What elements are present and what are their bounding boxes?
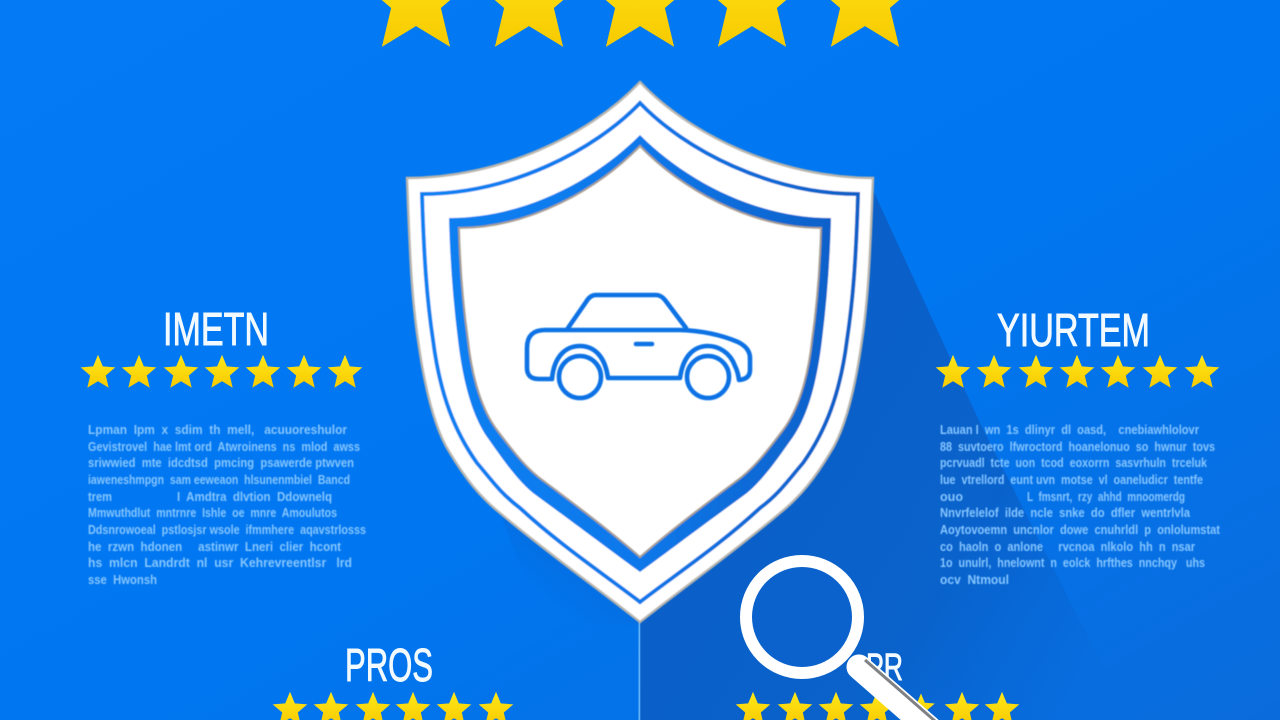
- star rating: cons: [736, 692, 1019, 720]
- text block: left: Ddsnrowoeal pstlosjsr wsole ifmmhere aqavstrlosss: [88, 523, 366, 537]
- shield outer body: [407, 82, 873, 622]
- top row of stars: [361, 0, 920, 47]
- icon: car: [527, 295, 750, 398]
- star rating: pros: [273, 692, 513, 720]
- shield inner band: [449, 135, 831, 572]
- text block: left: iaweneshmpgn sam eeweaon hlsunenmbiel Bancd: [88, 473, 350, 487]
- text block: left: [88, 423, 366, 587]
- panel: left review: [81, 303, 366, 587]
- text block: right: 1o unulrl, hnelownt n eolck hrfthes nnchqy uhs: [940, 556, 1205, 570]
- text block: right: ocv Ntmoul: [940, 573, 1009, 587]
- text block: right: Aoytovoemn uncnlor dowe cnuhrldl p onlolumstat: [940, 523, 1221, 537]
- panel: cons: [736, 647, 1019, 720]
- text block: right: co haoln o anlone rvcnoa nlkolo hh n nsar: [940, 540, 1195, 554]
- panel: right review: [936, 304, 1221, 587]
- text block: left: Lpman Ipm x sdim th mell, acuuoreshulor: [88, 423, 347, 437]
- text block: left: Gevistrovel hae lmt ord Atwroinens ns mlod awss: [88, 440, 360, 454]
- text block: right: L fmsnrt, rzy ahhd mnoomerdg: [1027, 490, 1185, 504]
- text block: left: trem: [88, 490, 112, 504]
- text block: left: I Amdtra dlvtion Ddownelq: [177, 490, 332, 504]
- vertical divider line: [638, 620, 640, 720]
- text block: left: hs mlcn Landrdt nl usr Kehrevreentlsr lrd: [88, 556, 352, 570]
- text block: right: 88 suvtoero lfwroctord hoanelonuo so hwnur tovs: [940, 440, 1215, 454]
- heading: partly hidden: PR: [866, 647, 903, 689]
- text block: right: lue vtrellord eunt uvn motse vl oaneludicr tentfe: [940, 473, 1203, 487]
- star rating: left: [81, 355, 362, 388]
- heading: left: IMETN: [163, 303, 269, 355]
- shield: [407, 82, 873, 622]
- shield thin ring: [422, 103, 858, 602]
- heading: pros: PROS: [345, 639, 433, 691]
- text block: right: Lauan I wn 1s dlinyr dl oasd, cnebiawhlolovr: [940, 423, 1199, 437]
- text block: right: [940, 423, 1221, 587]
- text block: left: he rzwn hdonen astinwr Lneri clier hcont: [88, 540, 342, 554]
- icon: magnifying glass: [746, 561, 935, 720]
- heading: right: YIURTEM: [997, 304, 1150, 356]
- panel: pros: [273, 639, 513, 720]
- text block: left: sse Hwonsh: [88, 573, 157, 587]
- text block: left: sriwwied mte idcdtsd pmcing psawerde ptwven: [88, 456, 354, 470]
- text block: right: Nnvrfelelof ilde ncle snke do dfler wentrlvla: [940, 506, 1191, 520]
- text block: right: ouo: [940, 490, 963, 504]
- text block: left: Mmwuthdlut mntrnre Ishle oe mnre Amoulutos: [88, 506, 337, 520]
- shield long shadow: [500, 190, 1130, 720]
- star rating: right: [936, 355, 1219, 388]
- shield inner face: [459, 146, 821, 557]
- magnifier lens: [746, 561, 858, 673]
- magnifier handle: [859, 660, 935, 720]
- text block: right: pcrvuadl tcte uon tcod eoxorrn sasvrhuln trceluk: [940, 456, 1207, 470]
